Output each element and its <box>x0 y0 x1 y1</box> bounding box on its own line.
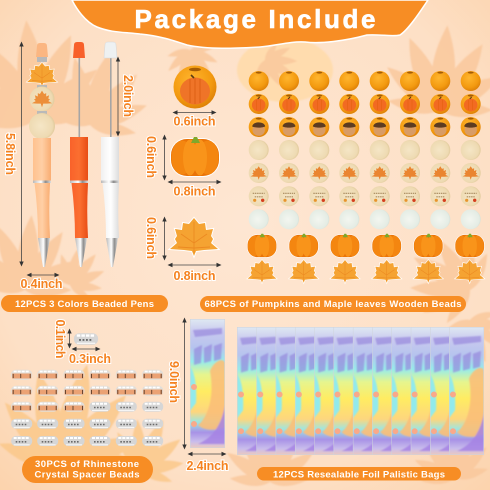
spacer bead grid <box>11 370 163 446</box>
arrow: bag width <box>190 453 224 455</box>
arrow: pumpkin height <box>164 137 166 178</box>
arrow: bag height <box>184 320 186 447</box>
label: foil bags: 12PCS Resealable Foil Palistic Bags <box>273 470 445 480</box>
icon: maple leaf charm <box>170 218 218 256</box>
arrow: leaf width <box>170 264 219 266</box>
label: spacer beads <box>22 456 153 483</box>
label: spacer beads: 30PCS of Rhinestone <box>35 459 139 470</box>
arrow: pen length <box>20 44 22 264</box>
title: Package Include <box>134 4 376 34</box>
arrow: bead width <box>175 112 214 114</box>
panel: foil bags <box>167 319 484 480</box>
dimension: 0.3inch: 0.3inch <box>69 352 111 366</box>
pen: peach <box>27 43 57 267</box>
dimension: bead 0.6inch: 0.6inch <box>174 114 216 128</box>
pen: orange <box>70 42 88 267</box>
icon: single foil bag <box>190 319 225 448</box>
label: spacer beads: Crystal Spacer Beads <box>34 470 140 480</box>
panel: beaded pens <box>3 42 135 291</box>
arrow: rod length <box>117 59 119 134</box>
label: wooden beads <box>200 296 466 312</box>
icon: pumpkin charm <box>170 137 220 177</box>
arrow: pen width <box>29 274 57 276</box>
dimension: pumpkin 0.6inch: 0.6inch <box>144 136 158 178</box>
dimension: leaf 0.6inch: 0.6inch <box>144 217 158 259</box>
label: foil bags <box>257 467 461 480</box>
dimension: 2.4inch: 2.4inch <box>186 459 228 473</box>
dimension: 9.0inch: 9.0inch <box>167 361 181 403</box>
dimension: 5.8inch: 5.8inch <box>3 133 17 175</box>
label: wooden beads: 68PCS of Pumpkins and Maple leaves Wooden Beads <box>204 299 462 310</box>
dimension: leaf 0.8inch: 0.8inch <box>174 269 216 283</box>
dimension: 2.0inch: 2.0inch <box>121 75 135 117</box>
dimension: pumpkin 0.8inch: 0.8inch <box>174 184 216 198</box>
label: pens: 12PCS 3 Colors Beaded Pens <box>15 299 154 310</box>
arrow: pumpkin width <box>170 181 219 183</box>
header banner <box>72 0 428 48</box>
dimension: 0.4inch: 0.4inch <box>20 277 62 291</box>
foil bag row <box>237 327 484 455</box>
dimension: 0.1inch: 0.1inch <box>53 320 67 358</box>
arrow: spacer width <box>74 348 98 350</box>
pen: white <box>101 42 119 267</box>
arrow: spacer height <box>68 331 70 346</box>
panel: sample beads with sizes <box>144 66 220 283</box>
label: pens <box>1 295 168 312</box>
panel: rhinestone spacer beads <box>11 320 163 483</box>
arrow: leaf height <box>164 219 166 258</box>
icon: pumpkin bead <box>174 66 216 108</box>
panel: wooden beads grid <box>247 71 485 283</box>
icon: sample spacer <box>74 333 98 345</box>
